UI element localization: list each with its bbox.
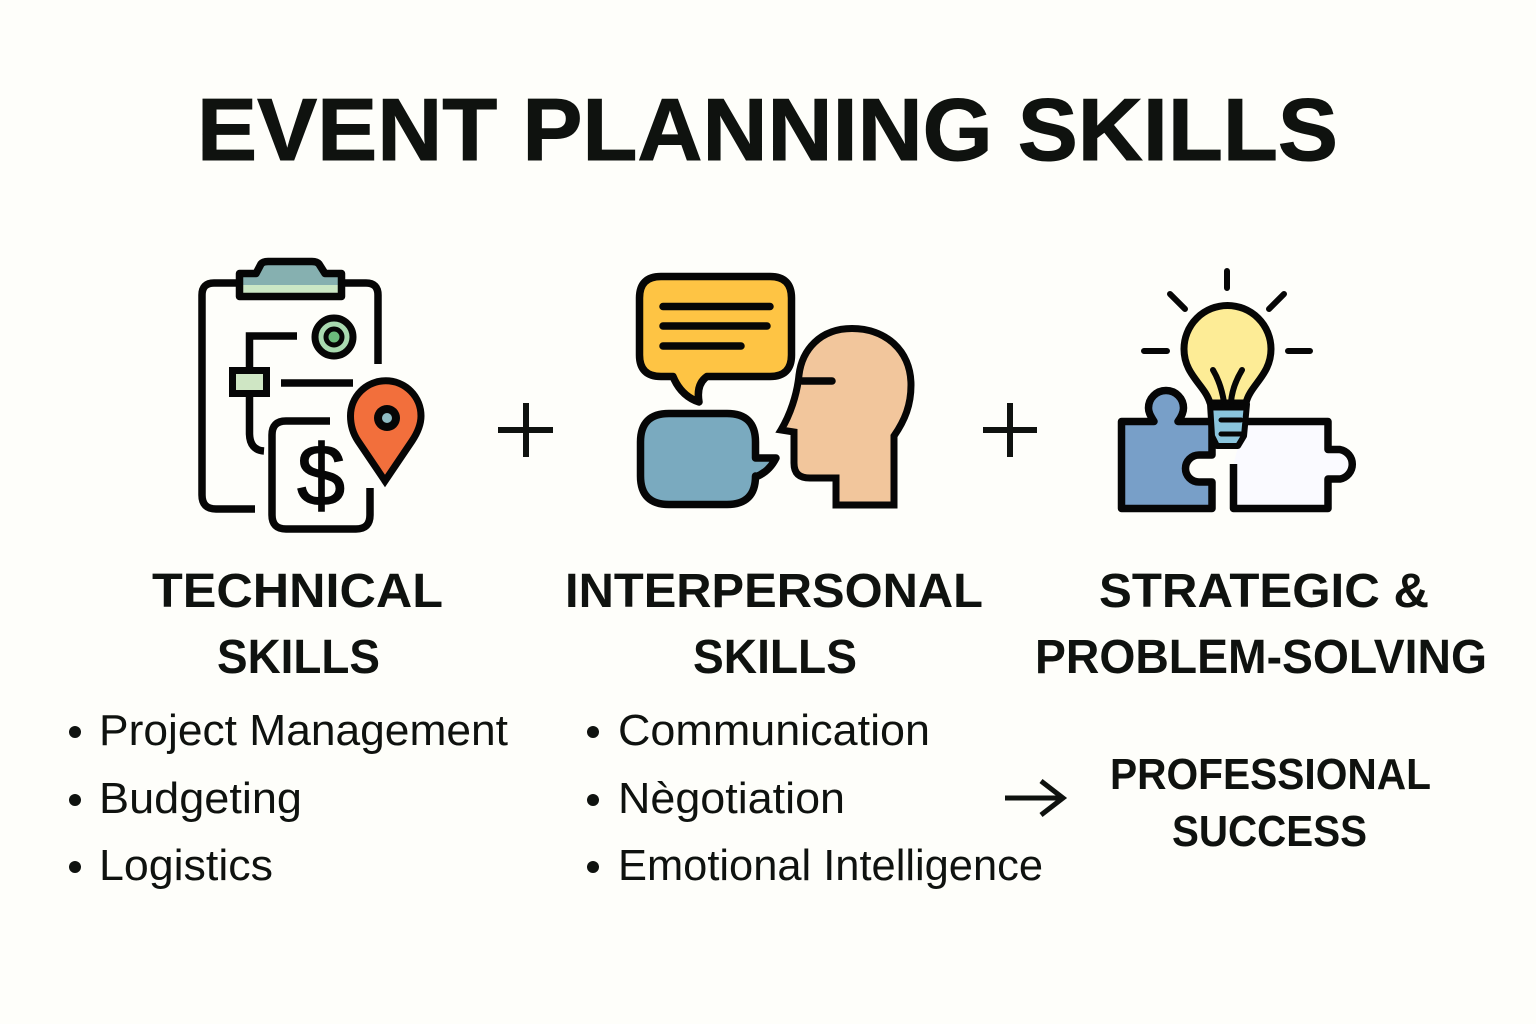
- heading: technical skills: TECHNICAL: [152, 565, 443, 618]
- result: professional success: PROFESSIONAL: [1110, 750, 1431, 799]
- icon: clipboard with plan, budget and location: [202, 262, 421, 529]
- arrow: [1005, 781, 1063, 815]
- heading: interpersonal skills: [565, 565, 983, 684]
- target icon: [315, 318, 353, 356]
- heading: interpersonal skills: SKILLS: [693, 631, 857, 684]
- clipboard clip: [240, 262, 342, 296]
- list: technical skills: Logistics: [99, 841, 273, 890]
- heading: strategic and problem-solving: STRATEGIC &: [1099, 565, 1429, 618]
- icon: light bulb and puzzle pieces: [1122, 271, 1352, 508]
- light rays: [1144, 271, 1310, 351]
- heading: strategic and problem-solving: [1035, 565, 1487, 684]
- yellow speech bubble: [640, 276, 792, 402]
- list: technical skills: Project Management: [99, 706, 508, 755]
- panel: technical skills: [69, 262, 508, 890]
- blue speech bubble: [640, 414, 776, 504]
- result: professional success: SUCCESS: [1172, 807, 1367, 856]
- heading: technical skills: [152, 565, 443, 684]
- light bulb: [1184, 306, 1271, 446]
- panel: interpersonal skills: [565, 276, 1043, 890]
- heading: technical skills: SKILLS: [217, 631, 380, 684]
- heading: strategic and problem-solving: PROBLEM-SOLVING: [1035, 631, 1487, 684]
- result: professional success: [1110, 750, 1431, 856]
- list: interpersonal skills: [587, 706, 1043, 890]
- list: interpersonal skills: Communication: [618, 706, 930, 755]
- list: interpersonal skills: Emotional Intelligence: [618, 841, 1043, 890]
- dollar card: [272, 421, 370, 529]
- white puzzle piece: [1234, 422, 1352, 508]
- icon: speech bubbles and head: [640, 276, 911, 505]
- panel: strategic and problem-solving: [1035, 271, 1487, 684]
- list: interpersonal skills: Nègotiation: [618, 774, 845, 823]
- list: technical skills: Budgeting: [99, 774, 302, 823]
- heading: interpersonal skills: INTERPERSONAL: [565, 565, 983, 618]
- plus sign: [983, 403, 1037, 457]
- title: EVENT PLANNING SKILLS: [197, 80, 1338, 179]
- plus sign: [498, 403, 553, 457]
- dollar card: $: [297, 428, 345, 524]
- blue puzzle piece: [1122, 390, 1212, 508]
- list: technical skills: [69, 706, 508, 890]
- flow chart lines: [232, 336, 353, 451]
- icon: location pin: [350, 381, 421, 481]
- head profile: [781, 328, 911, 505]
